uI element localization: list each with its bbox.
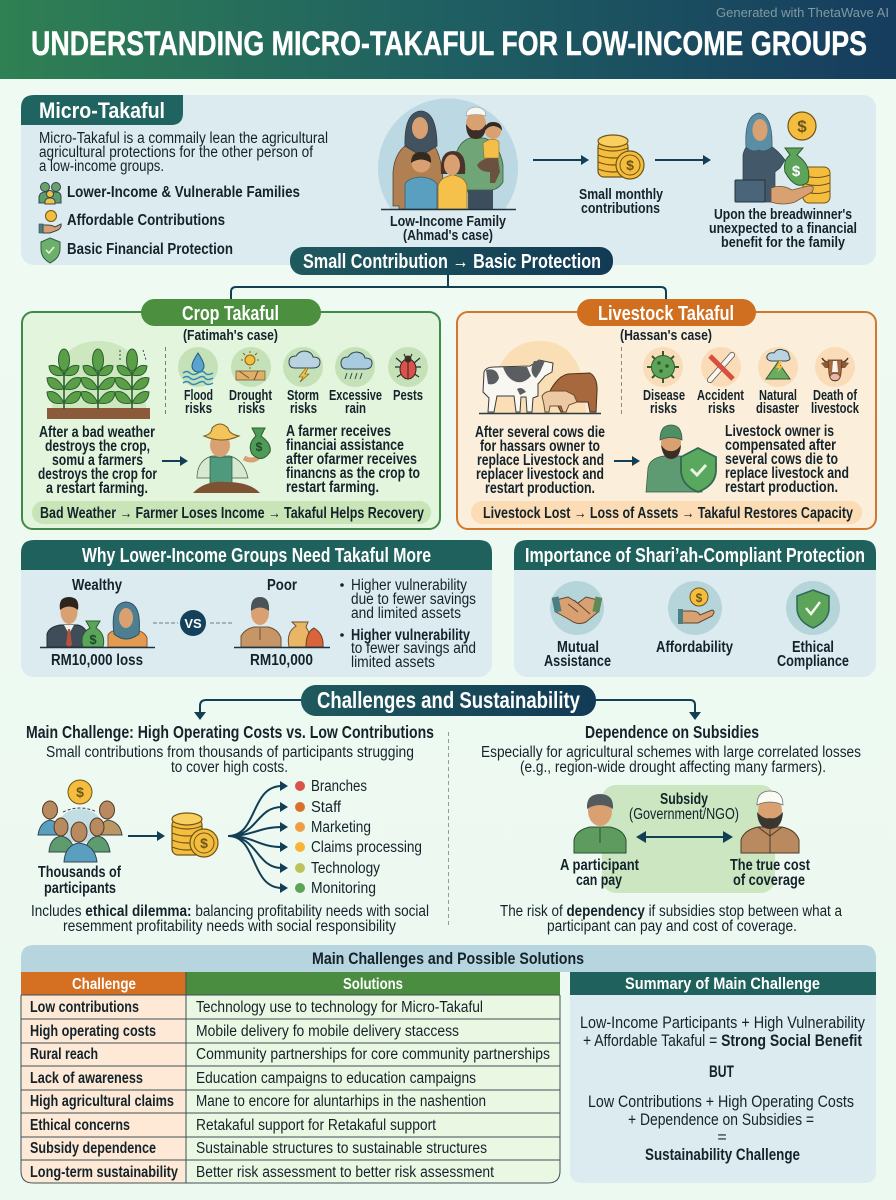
bullet list: and limited assets (351, 605, 461, 622)
item: ethical compliance (777, 581, 849, 670)
bullet list: to fewer savings and (351, 640, 476, 657)
feature: protection: Basic Financial Protection (67, 241, 233, 258)
illustration: participants: $ (76, 784, 84, 800)
poor column: Poor (267, 577, 297, 594)
arrows from challenges banner (194, 700, 701, 720)
definition text: a low-income groups. (39, 158, 164, 175)
row: lack of awareness: Lack of awareness (30, 1070, 143, 1087)
connector tree (231, 275, 666, 300)
bullet list (340, 577, 476, 671)
figure: true cost: The true cost (730, 857, 810, 874)
row: high operating costs: Mobile delivery fo mobile delivery staccess (196, 1023, 459, 1040)
intro text: to cover high costs. (171, 759, 288, 776)
bullet list: Higher vulnerability (351, 627, 470, 644)
intro text (481, 744, 861, 776)
illustration: participants (38, 780, 122, 862)
illustration: farmer: $ (256, 440, 263, 454)
subsidy label: Subsidy (660, 791, 708, 808)
heading (577, 299, 756, 326)
contributions caption (579, 186, 664, 217)
flow bar: Bad Weather → Farmer Loses Income → Takaful Helps Recovery (40, 505, 424, 522)
feature: families: Lower-Income & Vulnerable Families (67, 184, 300, 201)
summary text: BUT (709, 1062, 734, 1081)
summary text: Low Contributions + High Operating Costs (588, 1093, 854, 1111)
text: after several cows die: After several cows die (475, 424, 605, 441)
heading (514, 540, 876, 570)
risk: excessive rain: Excessive (329, 388, 382, 404)
item: affordability: $ (696, 591, 703, 605)
family caption: (Ahmad's case) (403, 227, 493, 244)
risk: disease (643, 347, 685, 417)
summary text (580, 1014, 866, 1164)
illustration: farmer (193, 424, 270, 493)
text: livestock owner compensated: compensated after (725, 437, 836, 454)
cost list (295, 778, 422, 897)
figure: participant (560, 794, 639, 889)
row: long-term sustainability: Better risk assessment to better risk assessment (196, 1164, 495, 1181)
bullet list: due to fewer savings (351, 591, 476, 608)
item: affordability: Affordability (656, 639, 733, 656)
dependency text: participant can pay and cost of coverage. (547, 918, 797, 935)
ethical dilemma text: Includes ethical dilemma: balancing profitability needs with social (31, 903, 429, 920)
icon: coin stack (172, 813, 218, 857)
flow bar (32, 501, 431, 524)
text: livestock owner compensated: replace livestock and (725, 465, 849, 482)
summary heading: Summary of Main Challenge (625, 974, 820, 993)
panel: why lower-income groups need takaful more (21, 540, 492, 677)
ethical dilemma text: resemment profitability needs with social responsibility (63, 918, 396, 935)
figure: true cost (730, 791, 810, 889)
participants caption (38, 864, 122, 897)
row: long-term sustainability: Long-term sustainability (30, 1164, 178, 1181)
heading: Dependence on Subsidies (585, 722, 759, 742)
risk: accident (697, 347, 744, 417)
risk: natural disaster (756, 347, 799, 417)
risk: excessive rain (329, 347, 382, 417)
figure: participant: can pay (576, 872, 622, 889)
heading: Crop Takaful (182, 303, 279, 325)
flow bar (471, 501, 862, 524)
wealthy column (40, 577, 155, 669)
text: after bad weather: destroys the crop, (45, 438, 150, 455)
row: rural reach: Community partnerships for core community partnerships (196, 1046, 550, 1063)
risk: disease: Disease (643, 388, 685, 404)
row: long-term sustainability (30, 1164, 495, 1181)
arrow (162, 456, 188, 466)
text: livestock owner compensated: restart production. (725, 479, 838, 496)
poor column: RM10,000 (250, 652, 313, 669)
row: ethical concerns (30, 1117, 437, 1134)
risk: excessive rain: rain (345, 401, 366, 417)
risk: flood: risks (185, 401, 212, 417)
definition text: agricultural protections for the other person of (39, 144, 314, 161)
risk: accident: Accident (697, 388, 744, 404)
feature: contributions (39, 210, 225, 233)
poor column (234, 577, 330, 669)
item: mutual assistance (544, 581, 611, 670)
dependency text: The risk of dependency if subsidies stop between what a (500, 903, 842, 920)
illustration: benefit recipient: $ (792, 163, 801, 180)
table (21, 972, 560, 1183)
watermark: Generated with ThetaWave AI (716, 6, 889, 20)
risk: natural disaster: Natural (759, 388, 797, 404)
heading tab: Micro-Takaful (39, 98, 165, 123)
bullet list: Higher vulnerability (351, 577, 467, 594)
illustration: low-income family (378, 98, 518, 210)
risk: drought: risks (238, 401, 265, 417)
row: ethical concerns: Ethical concerns (30, 1117, 130, 1134)
row: subsidy dependence: Sustainable structures to sustainable structures (196, 1140, 487, 1157)
panel: livestock takaful (457, 299, 876, 529)
section: main challenge (26, 722, 434, 935)
row: subsidy dependence (30, 1140, 487, 1157)
arrow (533, 155, 589, 165)
heading: Livestock Takaful (598, 303, 734, 325)
risk: death of livestock: Death of (813, 388, 857, 404)
panel: shari'ah-compliant protection (514, 540, 876, 677)
cost list: Monitoring (311, 880, 376, 897)
row: rural reach: Rural reach (30, 1046, 98, 1063)
ethical dilemma text (31, 903, 429, 935)
panel: micro-takaful (21, 95, 876, 265)
row: low contributions: Low contributions (30, 999, 139, 1016)
row: subsidy dependence: Subsidy dependence (30, 1140, 156, 1157)
intro text: (e.g., region-wide drought affecting many farmers). (520, 759, 826, 776)
dependency text (500, 903, 842, 935)
illustration: livestock owner with shield (646, 425, 716, 492)
panel title: Main Challenges and Possible Solutions (312, 949, 584, 968)
participants caption: participants (44, 880, 116, 897)
text: after bad weather (38, 424, 157, 497)
benefit caption: Upon the breadwinner's (714, 206, 852, 223)
definition text (39, 130, 328, 175)
subsidy label (629, 791, 739, 823)
text: livestock owner compensated: Livestock owner is (725, 423, 834, 440)
section: dependence on subsidies (481, 722, 861, 935)
illustration: benefit recipient (735, 112, 830, 204)
contributions caption: contributions (581, 200, 660, 217)
banner: challenges and sustainability: Challenges and Sustainability (317, 687, 580, 713)
wealthy column: $ (89, 632, 97, 647)
vs badge: VS (184, 616, 202, 631)
text: farmer receives: financns as the crop to (286, 465, 420, 482)
text: livestock owner compensated: several cows die to (725, 451, 838, 468)
row: high operating costs (30, 1023, 459, 1040)
cost list: Technology (311, 860, 380, 877)
heading (21, 540, 492, 570)
cost list: Staff (311, 799, 342, 816)
risk: flood: Flood (184, 388, 213, 404)
summary heading (570, 972, 876, 995)
text: after bad weather: somu a farmers (52, 452, 143, 469)
benefit caption: benefit for the family (721, 234, 846, 251)
intro text (46, 744, 414, 776)
text: farmer receives: financiai assistance (286, 437, 404, 454)
branching arrows (228, 781, 288, 893)
row: low contributions: Technology use to technology for Micro-Takaful (196, 999, 483, 1016)
risk: drought (229, 347, 272, 417)
vs badge (153, 610, 232, 636)
item: mutual assistance: Assistance (544, 653, 611, 670)
benefit caption: unexpected to a financial (709, 220, 857, 237)
icon: coin stack (598, 135, 644, 179)
case label: (Hassan's case) (620, 327, 712, 344)
text: farmer receives: A farmer receives (286, 423, 391, 440)
text: after several cows die: replacer livestock and (476, 466, 604, 483)
text: farmer receives (286, 423, 420, 496)
participants caption: Thousands of (38, 864, 122, 881)
definition text: Micro-Takaful is a commaily lean the agricultural (39, 130, 328, 147)
risk: accident: risks (708, 401, 735, 417)
column header: solutions (186, 972, 560, 995)
heading (141, 299, 321, 326)
row: high agricultural claims: High agricultural claims (30, 1093, 174, 1110)
case label: (Fatimah's case) (183, 327, 278, 344)
subsidy label: (Government/NGO) (629, 806, 739, 823)
wealthy column: RM10,000 loss (51, 652, 143, 669)
banner: small contribution (290, 247, 613, 275)
text: after several cows die: replace Livestock and (477, 452, 604, 469)
risk: storm: Storm (287, 388, 319, 404)
summary text: + Affordable Takaful = Strong Social Benefit (583, 1032, 862, 1050)
row: high agricultural claims: Mane to encore for aluntarhips in the nashention (196, 1093, 486, 1110)
summary text: + Dependence on Subsidies = (628, 1111, 814, 1129)
benefit caption (709, 206, 857, 251)
illustration: crops (47, 341, 150, 419)
row: low contributions (30, 999, 483, 1016)
text: farmer receives: restart farming. (286, 479, 379, 496)
summary text: = (717, 1129, 727, 1146)
family caption (390, 213, 507, 244)
header banner (0, 0, 896, 79)
figure: participant: A participant (560, 857, 639, 874)
risk: storm (283, 347, 323, 417)
cost list: Claims processing (311, 839, 422, 856)
row: high agricultural claims (30, 1093, 486, 1110)
text: after bad weather: After a bad weather (39, 424, 155, 441)
contributions caption: Small monthly (579, 186, 664, 203)
risk: pests (388, 347, 428, 404)
text: after several cows die: for hassars owner to (480, 438, 600, 455)
row: ethical concerns: Retakaful support for Retakaful support (196, 1117, 437, 1134)
column header: challenge (21, 972, 186, 995)
wealthy column: Wealthy (72, 577, 122, 594)
item: affordability (656, 581, 733, 656)
heading: Why Lower-Income Groups Need Takaful More (82, 545, 431, 567)
arrow (655, 155, 711, 165)
column header: solutions: Solutions (343, 976, 403, 993)
risk: death of livestock (811, 347, 860, 417)
illustration: cows (479, 341, 601, 414)
feature: protection (41, 238, 233, 263)
feature: families (39, 182, 300, 204)
figure: true cost: of coverage (733, 872, 805, 889)
illustration: benefit recipient: $ (797, 117, 807, 136)
text: after several cows die (475, 424, 605, 497)
item: mutual assistance: Mutual (557, 639, 599, 656)
column header: challenge: Challenge (72, 976, 136, 993)
panel: main challenges and possible solutions (21, 945, 876, 1183)
row: lack of awareness: Education campaigns to education campaigns (196, 1070, 476, 1087)
summary text: Sustainability Challenge (645, 1146, 800, 1164)
risk: storm: risks (290, 401, 317, 417)
text: livestock owner compensated (725, 423, 849, 496)
banner: challenges and sustainability (301, 685, 596, 716)
risk: natural disaster: disaster (756, 401, 799, 417)
risk: death of livestock: livestock (811, 401, 860, 417)
cost list: Branches (311, 778, 367, 795)
banner: small contribution: Small Contribution → Basic Protection (303, 251, 601, 273)
risk: disease: risks (650, 401, 677, 417)
risk: pests: Pests (393, 388, 423, 404)
arrow (128, 831, 165, 841)
item: ethical compliance: Ethical (792, 639, 834, 656)
text: after bad weather: a restart farming. (46, 480, 148, 497)
heading: Main Challenge: High Operating Costs vs. Low Contributions (26, 722, 434, 742)
text: farmer receives: after ofarmer receives (286, 451, 417, 468)
subsidy zone (602, 785, 775, 893)
family caption: Low-Income Family (390, 213, 507, 230)
row: lack of awareness (30, 1070, 476, 1087)
double arrow (636, 831, 733, 843)
summary box (570, 972, 876, 1183)
intro text: Small contributions from thousands of participants strugging (46, 744, 414, 761)
text: after several cows die: restart production. (485, 480, 595, 497)
risk: flood (178, 347, 218, 417)
row: rural reach (30, 1046, 550, 1063)
text: after bad weather: destroys the crop for (38, 466, 157, 483)
cost list: Marketing (311, 819, 371, 836)
arrow (614, 456, 640, 466)
item: ethical compliance: Compliance (777, 653, 849, 670)
risk: drought: Drought (229, 388, 272, 404)
row: high operating costs: High operating costs (30, 1023, 156, 1040)
bullet list: limited assets (351, 654, 435, 671)
feature: contributions: Affordable Contributions (67, 212, 225, 229)
panel: crop takaful (22, 299, 440, 529)
